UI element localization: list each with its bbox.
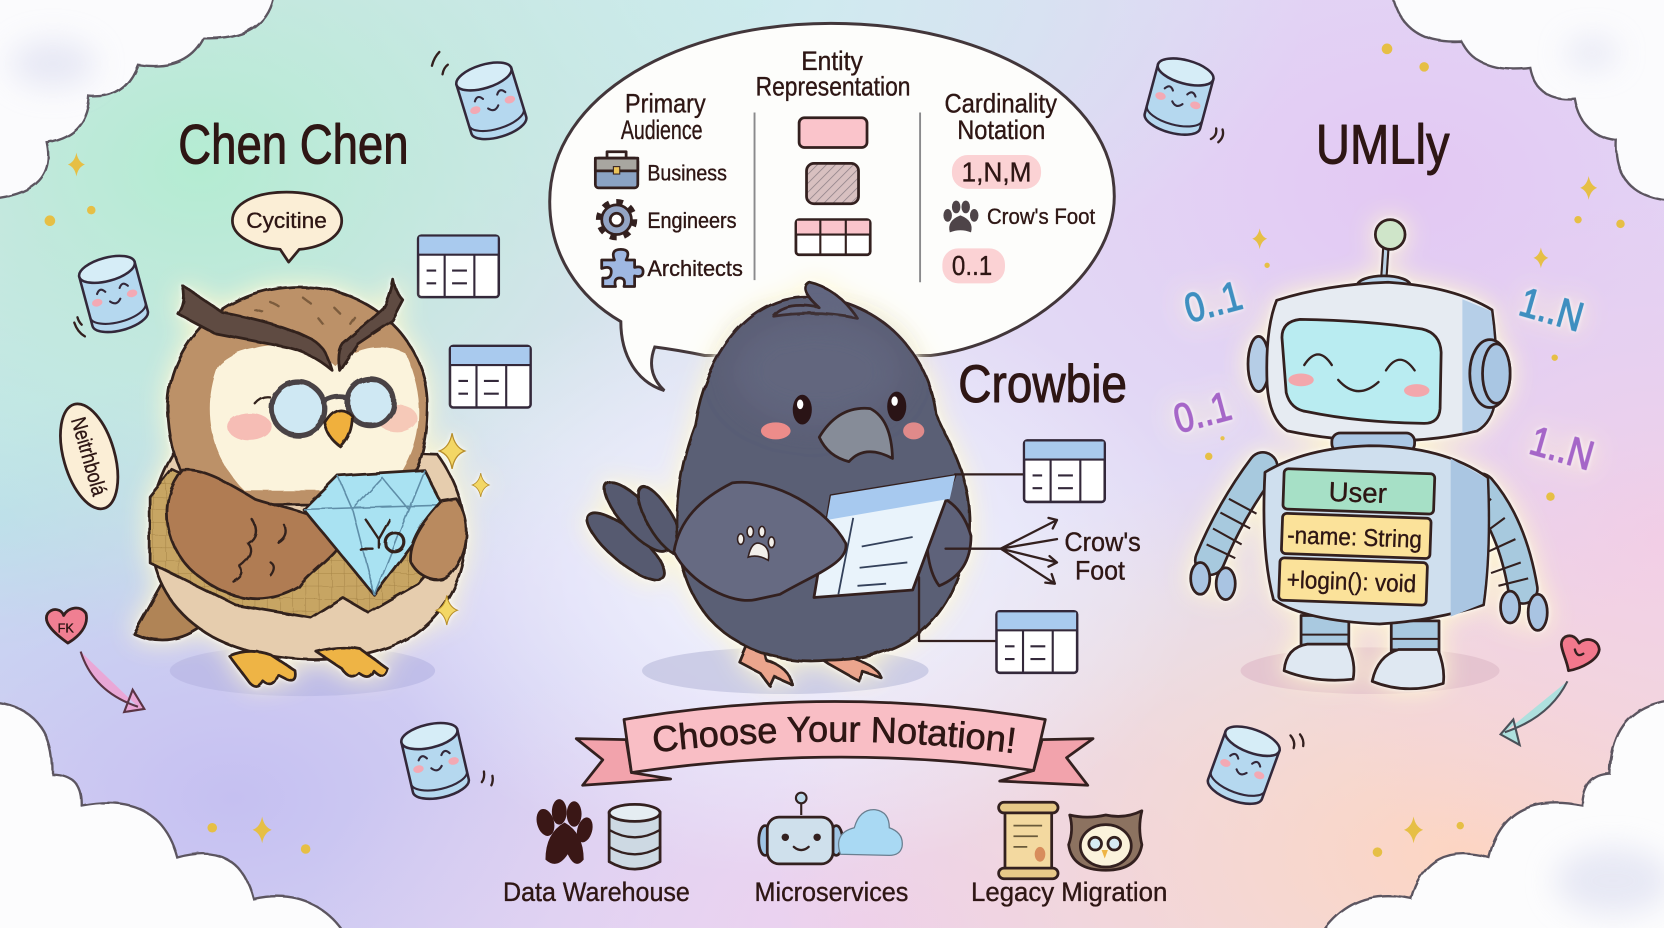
- banner text: Choose Your Notation!: [654, 716, 1015, 754]
- robot right ear: [1470, 340, 1510, 408]
- table: crow upper: [1024, 440, 1105, 502]
- owl blush: [227, 413, 272, 440]
- ribbon body: [624, 701, 1045, 773]
- paper: [814, 475, 955, 597]
- banner ribbon: [574, 700, 1094, 787]
- divider right: [919, 112, 921, 282]
- icon: floating database bottom left: [399, 718, 493, 804]
- connector: crow to table lower: [919, 577, 996, 641]
- owl face: [210, 345, 419, 490]
- crow body: [676, 297, 970, 661]
- notation label: 1..N purple: 1..N: [1525, 417, 1599, 479]
- heading: Primary Audience: Audience: [621, 115, 703, 145]
- icon: puzzle piece: [602, 249, 643, 287]
- arrow: teal: [1501, 681, 1567, 745]
- use case: Legacy Migration: [971, 802, 1167, 907]
- UML class card: [1279, 469, 1435, 605]
- robot head: [1267, 282, 1496, 441]
- heading: Entity Representation: Representation: [756, 72, 911, 102]
- label: Microservices: Microservices: [755, 877, 908, 907]
- label: Business: Business: [647, 160, 727, 185]
- notation label: 0..1 purple: 0..1: [1169, 383, 1236, 442]
- heading: Cardinality Notation: Cardinality: [944, 88, 1058, 118]
- cloud: bottom left: [0, 703, 345, 928]
- owl beak: [325, 410, 352, 447]
- owl wing: [167, 470, 344, 599]
- crow head tuft: [774, 282, 857, 318]
- heading: Entity Representation: [756, 46, 911, 102]
- pill: 0..1: [942, 248, 1005, 283]
- robot arms: [1191, 467, 1547, 630]
- icon: floating database bottom right: [1204, 720, 1303, 810]
- column: Entity Representation: [756, 46, 911, 255]
- attribute bubble: Neitrhbolá: [66, 415, 110, 499]
- owl left foot: [229, 651, 295, 687]
- label: Architects: Architects: [647, 256, 743, 281]
- column: Cardinality Notation: [942, 88, 1096, 283]
- character: crow Crowbie: [578, 282, 971, 694]
- paw mark on wing: [738, 526, 775, 560]
- crow eyes: [793, 392, 906, 424]
- pill: 1,N,M: 1,N,M: [961, 156, 1032, 187]
- crow right hand: [926, 493, 971, 586]
- heading: Primary Audience: Primary: [625, 88, 706, 118]
- robot screen: [1282, 319, 1441, 423]
- crow wing: [674, 482, 846, 600]
- icon: mini robot: [759, 793, 843, 864]
- arrow: pink: [81, 652, 144, 712]
- method: login: +login(): void: [1286, 567, 1417, 598]
- attribute bubble: [50, 397, 129, 515]
- crow shadow: [642, 647, 929, 694]
- label: Legacy Migration: Legacy Migration: [971, 877, 1167, 907]
- crow blush: [761, 422, 791, 439]
- robot legs: [1284, 616, 1444, 689]
- title: Chen Chen: Chen Chen: [178, 113, 409, 175]
- small speech bubble: [232, 192, 342, 262]
- icon: gear: [600, 203, 634, 237]
- title: UMLly: UMLly: [1316, 113, 1450, 175]
- icon: scroll: [999, 802, 1058, 879]
- class name: User: [1283, 469, 1435, 514]
- icon: database stack: [609, 804, 660, 869]
- icon: floating database top centre-left: [432, 52, 530, 145]
- heart: FK: [46, 608, 87, 643]
- icon: cloud: [839, 810, 902, 855]
- heading: Primary Audience: [621, 88, 706, 145]
- attribute: name: [1281, 513, 1431, 559]
- notation label: 1..N blue: 1..N: [1515, 279, 1589, 341]
- label: Engineers: Engineers: [647, 208, 736, 233]
- cloud: bottom right: [1321, 700, 1664, 928]
- icon: floating database left: [74, 251, 151, 337]
- owl head feather strokes: [255, 297, 356, 325]
- entity: table: [796, 220, 870, 255]
- entity: pink rectangle: [799, 118, 867, 148]
- owl body: [150, 446, 465, 660]
- use case: Microservices: [755, 793, 908, 907]
- label: Crow's Foot annotation: Crow's: [1064, 527, 1141, 557]
- owl head: [168, 287, 428, 504]
- title: Crowbie: Crowbie: [958, 355, 1127, 414]
- heading: Cardinality Notation: [944, 88, 1058, 145]
- owl glasses: [272, 379, 394, 435]
- owl shadow: [170, 645, 435, 696]
- owl sparkles: [436, 433, 489, 625]
- heart: right: [1561, 636, 1599, 671]
- label: Crow's Foot: Crow's Foot: [987, 204, 1096, 229]
- robot shadow: [1241, 647, 1500, 694]
- attribute: name: -name: String: [1287, 522, 1422, 554]
- table icon: upper: [418, 236, 499, 297]
- icon: dark paw: [534, 799, 595, 864]
- gem: [304, 470, 443, 595]
- cloud: top left: [0, 0, 274, 198]
- ribbon tails: [576, 739, 1093, 785]
- crow beak: [819, 408, 892, 462]
- crow's foot arrow: [946, 518, 1057, 584]
- icon: briefcase: [595, 152, 638, 188]
- table icon: lower: [450, 346, 531, 408]
- robot neck: [1332, 433, 1415, 452]
- crow legs and feet: [740, 635, 881, 687]
- notation label: 0..1 blue: 0..1: [1180, 272, 1247, 332]
- robot torso shading: [1451, 458, 1488, 617]
- heading: Cardinality Notation: Notation: [957, 115, 1045, 145]
- cloud: top right: [1392, 0, 1664, 201]
- owl right foot: [316, 648, 387, 677]
- crow face highlight: [732, 318, 902, 424]
- class name: User: User: [1328, 476, 1387, 509]
- character: robot UMLly: [1191, 220, 1547, 694]
- owl right wing: [411, 499, 466, 580]
- icon: floating database top right: [1142, 53, 1223, 142]
- icon: mini owl: [1069, 811, 1142, 870]
- robot face: [1288, 354, 1429, 397]
- use case: Data Warehouse: [503, 799, 690, 907]
- method: login: [1279, 558, 1428, 605]
- connector: crow to table upper: [955, 473, 1024, 475]
- crow tail: [578, 474, 690, 590]
- character: owl Chen Chen: [134, 279, 489, 696]
- robot torso: [1264, 446, 1489, 624]
- heading: Entity Representation: Entity: [801, 46, 863, 76]
- icon: paw: [943, 201, 978, 232]
- label: Data Warehouse: Data Warehouse: [503, 877, 690, 907]
- owl tail: [134, 578, 202, 640]
- owl wing feather scallops: [233, 520, 286, 582]
- entity: hatched rectangle: [807, 163, 859, 204]
- divider left: [754, 112, 756, 280]
- pill: 0..1: 0..1: [952, 250, 992, 281]
- owl brows and ear tufts: [178, 279, 403, 370]
- robot head side shading: [1462, 299, 1495, 433]
- speech bubble: comparison: [550, 23, 1114, 391]
- small speech bubble: Cycitine: [246, 208, 327, 233]
- heart: FK: FK: [58, 620, 74, 635]
- label: Crow's Foot annotation: Foot: [1075, 555, 1125, 585]
- label: Crow's Foot annotation: [1064, 527, 1141, 585]
- table: crow lower: [996, 611, 1077, 673]
- robot antenna: [1357, 220, 1410, 295]
- robot left ear: [1248, 336, 1269, 392]
- column: Primary Audience: [595, 88, 743, 287]
- owl vest: [150, 469, 446, 618]
